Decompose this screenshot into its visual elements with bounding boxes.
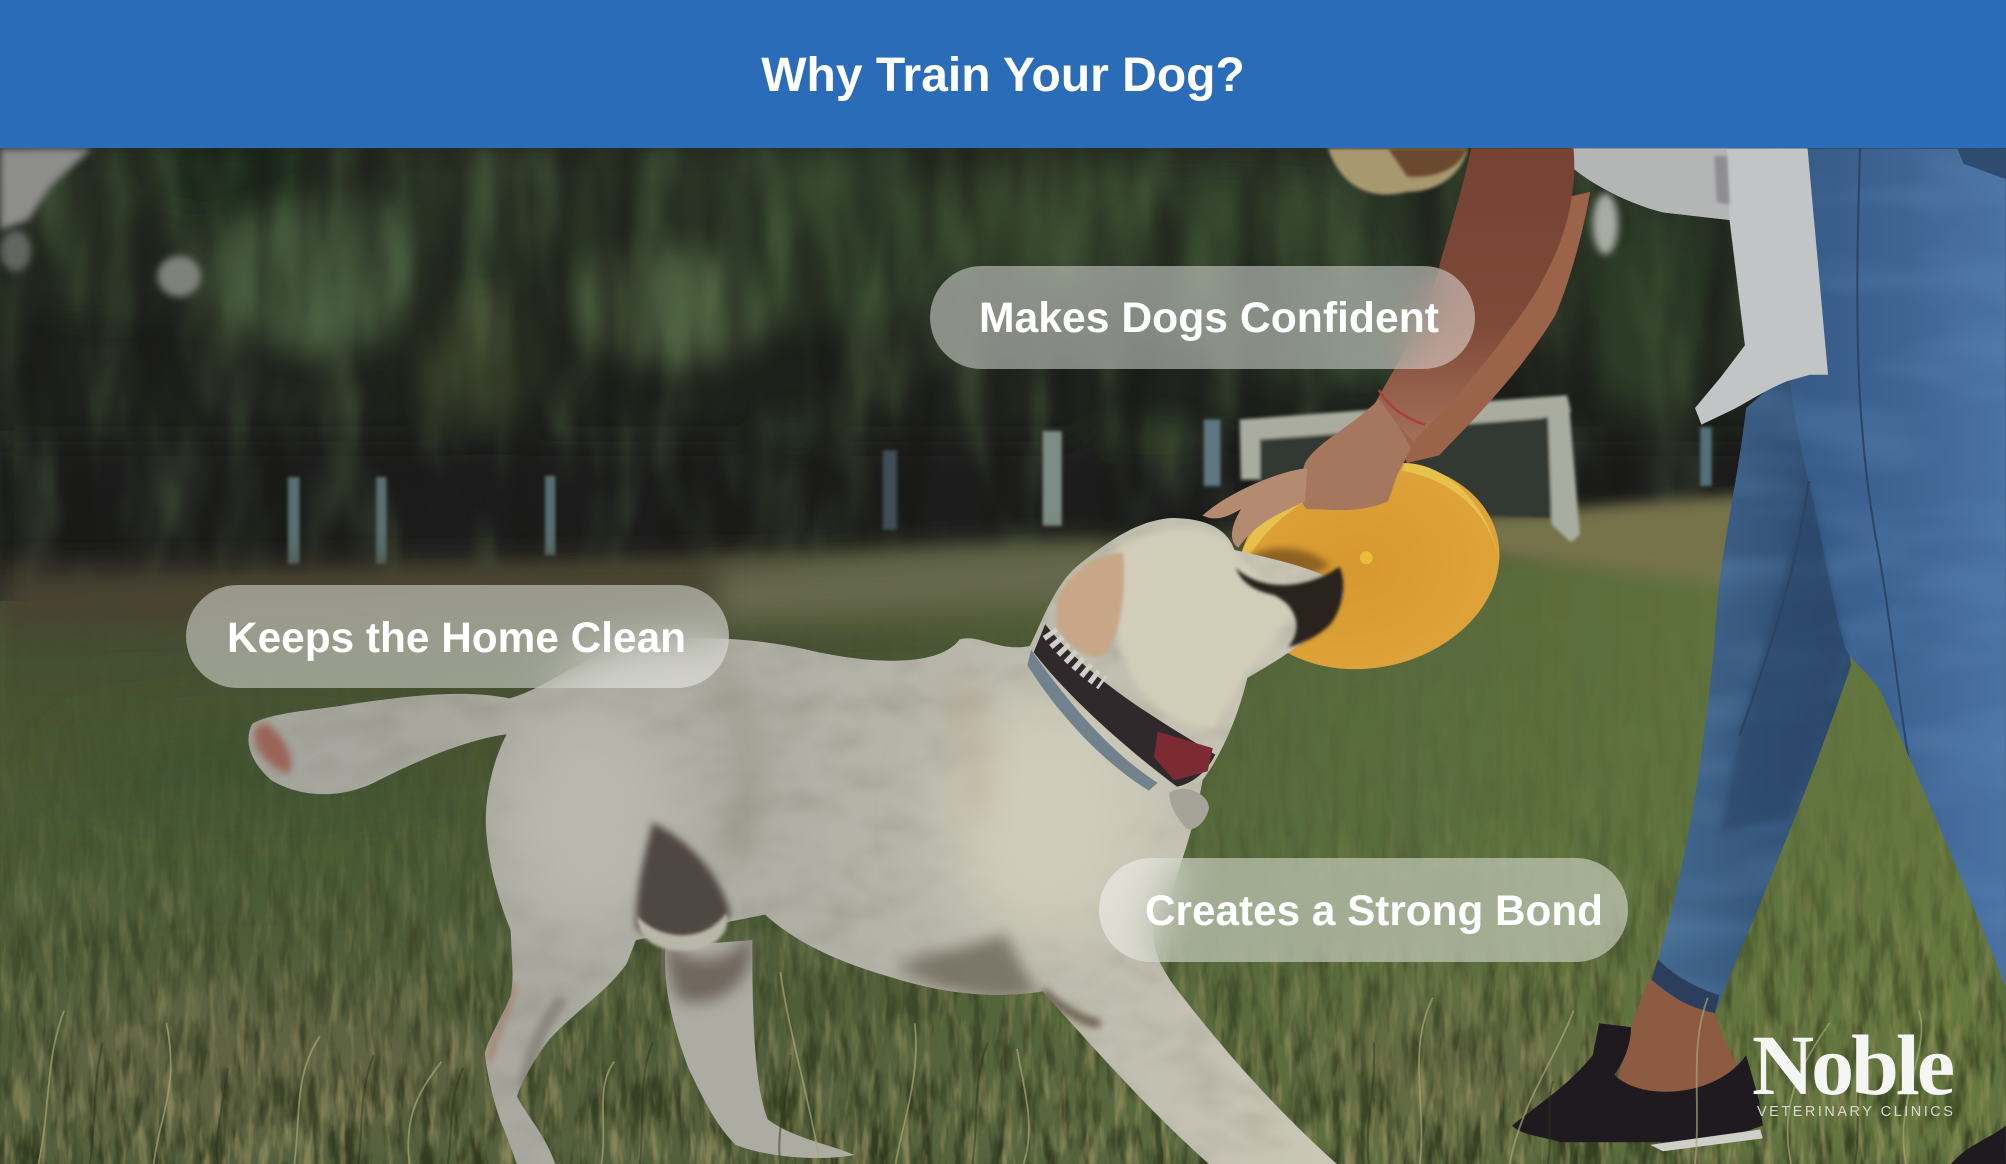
far hind leg [665,940,855,1158]
person: jeans and shirt [1571,148,2006,1018]
head highlight [1111,527,1292,729]
logo: Noble Veterinary Clinics: VETERINARY CLINICS [1757,1104,1955,1120]
grass field [0,492,2006,1164]
ear [1057,553,1124,656]
logo: Noble Veterinary Clinics: Noble [1752,1017,1952,1113]
far leg [1652,371,1851,1016]
denim highlights [1662,148,1988,992]
orange frisbee [1219,438,1519,693]
far hand [1203,468,1307,547]
title banner: Why Train Your Dog? [761,49,1245,102]
body [248,518,1343,1164]
near leg [1790,148,2006,987]
callout: keeps the home clean [186,585,729,688]
dark patch under belly [636,822,731,940]
callout: keeps the home clean: Keeps the Home Clean [227,614,686,662]
title banner [0,0,2006,148]
tail tip [254,723,291,774]
ankle and shoe [1617,979,1742,1100]
collar [1034,624,1215,787]
jean cuff [1652,959,1719,1016]
callout: makes dogs confident [930,266,1475,369]
callout: creates a strong bond [1099,858,1628,962]
foreground grass blades [39,972,1921,1164]
person: arms and hands [1203,148,2006,1164]
soccer goal [1240,395,1580,542]
dog [243,512,1343,1164]
forest background [0,141,2006,622]
fence posts [288,420,1712,564]
hair [1328,148,1467,194]
callout: makes dogs confident: Makes Dogs Confident [979,294,1439,342]
shirt [1571,148,1828,425]
muzzle and mouth [1236,567,1343,647]
far arm [1382,192,1590,463]
tag [1169,789,1209,829]
callout: creates a strong bond: Creates a Strong Bond [1145,887,1603,935]
fur shading [344,529,1322,1159]
near arm [1375,148,1574,441]
gripping hand [1301,399,1411,510]
